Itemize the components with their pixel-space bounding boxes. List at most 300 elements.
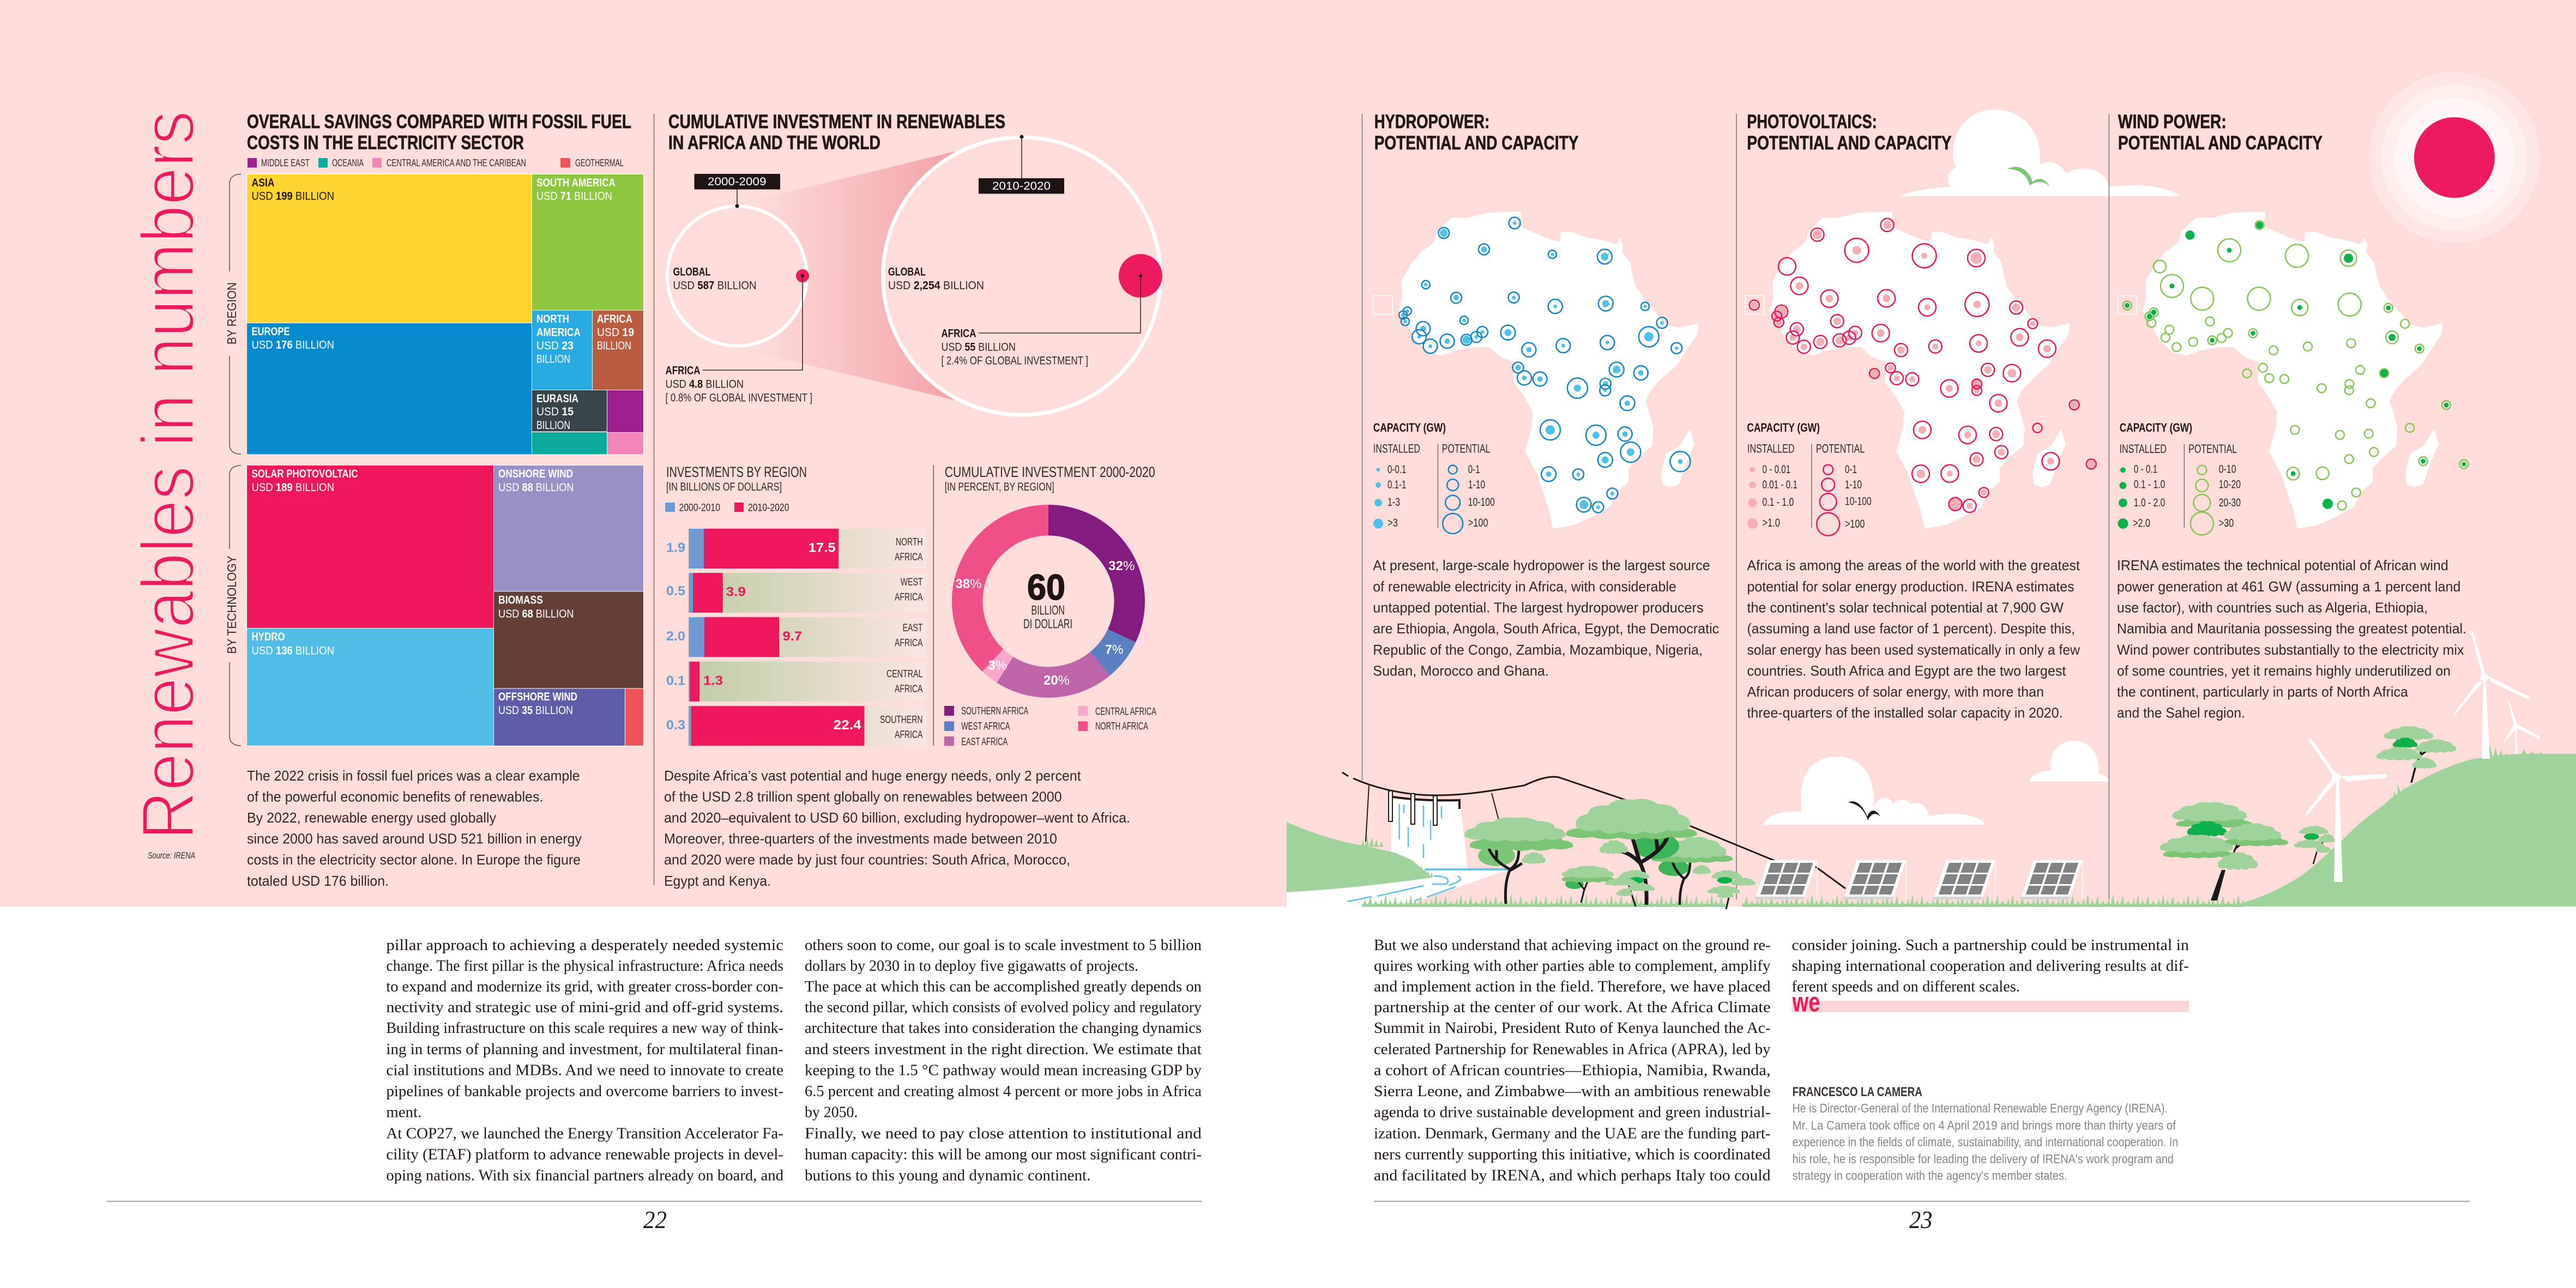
author bio: strategy in cooperation with the agency's member states.	[1793, 1169, 2067, 1183]
article text: page 23 column 1: and implement action in the field. Therefore, we have placed	[1374, 978, 1771, 995]
legend: hydropower capacity: POTENTIAL	[1442, 442, 1491, 456]
article text: page 22 column 2: the second pillar, which consists of evolved policy and regulatory	[805, 999, 1202, 1016]
text block: hydropower: Republic of the Congo, Zambia, Mozambique, Nigeria,	[1373, 642, 1703, 658]
tile: Middle East	[607, 390, 643, 432]
label: global 2,254: GLOBAL	[888, 266, 926, 278]
tile: Solar photovoltaic	[247, 465, 493, 628]
article text: page 23 column 2	[1791, 937, 2189, 995]
text block: photovoltaics: (assuming a land use factor of 1 percent). Despite this,	[1747, 620, 2075, 637]
bracket: by region: BY REGION	[225, 282, 239, 344]
text block: photovoltaics: the continent's solar technical potential at 7,900 GW	[1747, 600, 2064, 616]
article text: page 23 column 1: partnership at the center of our work. At the Africa Climate	[1374, 999, 1771, 1016]
legend: regions: OCEANIA	[332, 158, 364, 168]
bar: West Africa: 3.9	[726, 584, 746, 600]
heading: investments by region: [IN BILLIONS OF DOLLARS]	[666, 481, 782, 493]
potential rings	[2123, 221, 2469, 510]
badge: 2010-2020: 2010-2020	[992, 180, 1051, 192]
text block: investment paragraph: and 2020–equivalent to USD 60 billion, excluding hydropower–went to Africa.	[664, 809, 1130, 826]
label: Africa 4.8	[665, 364, 812, 404]
panel: photovoltaics	[1745, 111, 2096, 721]
tile: Hydro	[247, 628, 493, 746]
article text: page 22 column 1: to expand and modernize its grid, with greater cross-border con-	[386, 978, 783, 995]
ground and grass	[1362, 894, 2243, 907]
legend: regions: MIDDLE EAST	[261, 158, 310, 168]
bar: Central Africa: AFRICA	[895, 684, 923, 695]
legend: donut regions	[944, 706, 1156, 748]
installed dots	[1401, 221, 1682, 509]
heading: wind power	[2118, 111, 2322, 154]
bar: North Africa: 1.9	[666, 541, 685, 555]
tile: Oceania	[532, 432, 607, 455]
end mark: we	[1791, 987, 2189, 1017]
tile: South America: SOUTH AMERICA	[536, 177, 616, 189]
page number 22: 22	[643, 1206, 667, 1233]
tree C	[1651, 837, 1733, 905]
legend: hydropower capacity: >3	[1387, 517, 1398, 529]
label: Africa 55: AFRICA	[941, 327, 976, 340]
heading: photovoltaics: PHOTOVOLTAICS:	[1747, 111, 1877, 132]
tile: Offshore wind: USD 35 BILLION	[498, 704, 573, 717]
text block: savings paragraph: costs in the electricity sector alone. In Europe the figure	[247, 851, 581, 868]
legend: photovoltaics capacity: >1.0	[1762, 517, 1780, 529]
bar: North Africa	[666, 529, 926, 569]
bar: Central Africa: CENTRAL	[886, 668, 922, 680]
article text: page 22 column 2: The pace at which this can be accomplished greatly depends on	[805, 978, 1202, 995]
text block: investment paragraph: Despite Africa’s vast potential and huge energy needs, only 2 percent	[664, 767, 1081, 784]
donut chart: 7%	[1105, 642, 1123, 657]
hill right	[2227, 744, 2576, 906]
legend: hydropower capacity: 10-100	[1468, 496, 1495, 509]
donut chart: 60	[1027, 567, 1065, 607]
article text: page 22 column 1	[386, 937, 783, 1184]
heading: cumulative 2000-2020: [IN PERCENT, BY REGION]	[945, 481, 1054, 493]
text block: photovoltaics: potential for solar energy production. IRENA estimates	[1747, 578, 2074, 595]
tile: Asia: USD 199 BILLION	[252, 190, 334, 203]
tile: Asia: ASIA	[252, 177, 275, 189]
wind turbines	[2306, 630, 2541, 882]
article text: page 22 column 1: Building infrastructure on this scale requires a new way of think-	[386, 1020, 783, 1037]
article text: page 23 column 1: But we also understand that achieving impact on the ground re-	[1374, 937, 1771, 954]
tree B	[1566, 799, 1697, 905]
heading: investments by region	[666, 464, 807, 493]
heading: wind power: WIND POWER:	[2118, 111, 2227, 132]
map: Africa photovoltaics	[1745, 211, 2096, 529]
text block: investment paragraph: Moreover, three-quarters of the investments made between 2010	[664, 831, 1057, 847]
text block: savings paragraph: totaled USD 176 billion.	[247, 873, 389, 889]
bar: West Africa	[666, 573, 926, 613]
page number 23: 23	[1909, 1206, 1932, 1233]
legend: wind capacity: 0 - 0.1	[2134, 463, 2157, 475]
legend: photovoltaics capacity: 0.1 - 1.0	[1762, 496, 1794, 509]
illustration: sun	[2369, 72, 2540, 243]
circle: 2000-2009 global	[667, 206, 807, 346]
bracket: by region	[225, 174, 241, 454]
article text: page 22 column 2: architecture that takes into consideration the changing dynamics	[805, 1020, 1202, 1037]
bar: West Africa: AFRICA	[895, 592, 923, 603]
tile: Eurasia	[532, 390, 607, 432]
legend: photovoltaics capacity: 10-100	[1845, 495, 1872, 507]
tile: Onshore wind	[494, 465, 643, 591]
tile: North America: NORTH	[536, 313, 569, 325]
author bio: He is Director-General of the International Renewable Energy Agency (IRENA).	[1793, 1101, 2168, 1115]
heading: overall savings: OVERALL SAVINGS COMPARED WITH FOSSIL FUEL	[247, 111, 631, 132]
heading: cumulative 2000-2020: CUMULATIVE INVESTMENT 2000-2020	[945, 464, 1155, 480]
legend: hydropower capacity: 0-1	[1468, 463, 1480, 476]
article text: page 22 column 2: keeping to the 1.5 °C pathway would mean increasing GDP by	[805, 1062, 1202, 1079]
legend: hydropower capacity: 0-0.1	[1387, 463, 1406, 476]
legend: wind capacity: 0-10	[2219, 463, 2236, 475]
text block: savings paragraph	[247, 767, 582, 889]
legend: photovoltaics capacity: 0-1	[1845, 463, 1857, 476]
article text: page 23 column 1	[1374, 937, 1771, 1184]
text block: wind: power generation at 461 GW (assuming a 1 percent land	[2117, 578, 2460, 595]
text block: photovoltaics: Africa is among the areas of the world with the greatest	[1747, 557, 2080, 573]
text block: wind	[2117, 557, 2466, 721]
article text: page 22 column 1: cility (ETAF) platform to advance renewable projects in devel-	[386, 1146, 783, 1163]
label: global 587	[673, 266, 757, 292]
article text: page 23 column 1: agenda to drive sustainable development and green industrial-	[1374, 1104, 1771, 1121]
label: Africa 4.8: AFRICA	[665, 364, 700, 377]
tile: Eurasia: EURASIA	[536, 392, 578, 405]
legend: photovoltaics capacity: INSTALLED	[1747, 442, 1795, 456]
article text: page 22 column 1: ment.	[386, 1104, 421, 1121]
article text: page 23 column 1: Summit in Nairobi, President Ruto of Kenya launched the Ac-	[1374, 1020, 1771, 1037]
author bio	[1793, 1085, 2178, 1183]
page rules	[107, 1201, 2470, 1202]
text block: photovoltaics	[1747, 557, 2080, 721]
legend: periods: 2000-2010	[679, 503, 720, 513]
bar: Southern Africa: 22.4	[834, 718, 861, 733]
legend: photovoltaics capacity	[1747, 421, 1872, 536]
article text: page 22 column 2: and steers investment in the right direction. We estimate that	[805, 1041, 1202, 1058]
bar: Southern Africa: SOUTHERN	[880, 715, 922, 726]
text block: investment paragraph: of the USD 2.8 trillion spent globally on renewables between 2000	[664, 789, 1062, 805]
article text: page 22 column 2: Finally, we need to pay close attention to institutional and	[805, 1125, 1202, 1142]
tile: Onshore wind: ONSHORE WIND	[498, 468, 573, 480]
article text: page 22 column 1: cial institutions and MDBs. And we need to innovate to create	[386, 1062, 783, 1079]
heading: hydropower: HYDROPOWER:	[1374, 111, 1489, 132]
text block: photovoltaics: countries. South Africa and Egypt are the two largest	[1747, 662, 2066, 679]
waterfall and river	[1287, 797, 1510, 906]
circle: 2010-2020 global	[883, 137, 1160, 415]
text block: hydropower: are Ethiopia, Angola, South Africa, Egypt, the Democratic	[1373, 620, 1719, 637]
clouds lower	[1764, 741, 2109, 825]
label: Africa 4.8: [ 0.8% OF GLOBAL INVESTMENT ]	[665, 391, 812, 404]
end mark: we: we	[1792, 987, 1820, 1017]
tile: Eurasia: USD 15	[536, 406, 574, 418]
heading: photovoltaics: POTENTIAL AND CAPACITY	[1747, 132, 1952, 154]
tile: North America: BILLION	[536, 353, 570, 365]
label: Africa 55: [ 2.4% OF GLOBAL INVESTMENT ]	[941, 354, 1088, 367]
text block: investment paragraph: and 2020 were made by just four countries: South Africa, Morocco,	[664, 851, 1070, 868]
article text: page 22 column 2: dollars by 2030 in to deploy five gigawatts of projects.	[805, 958, 1138, 975]
text block: wind: Wind power contributes substantially to the electricity mix	[2117, 642, 2464, 658]
text block: hydropower: of renewable electricity in Africa, with considerable	[1373, 578, 1676, 595]
title: Renewables in numbers: Renewables in numbers	[126, 111, 210, 840]
tile: Solar photovoltaic: SOLAR PHOTOVOLTAIC	[252, 468, 358, 480]
legend: wind capacity: CAPACITY (GW)	[2120, 421, 2192, 434]
article text: page 22 column 1: nectivity and strategic use of mini-grid and off-grid systems.	[386, 999, 783, 1016]
legend: periods: 2010-2020	[748, 503, 789, 513]
legend: wind capacity: POTENTIAL	[2188, 442, 2237, 456]
legend: regions: GEOTHERMAL	[575, 158, 624, 168]
funnel between circles	[737, 152, 955, 400]
donut chart: 20%	[1043, 673, 1070, 688]
article text: page 23 column 1: a cohort of African countries—Ethiopia, Namibia, Rwanda,	[1374, 1062, 1771, 1079]
bar: West Africa: 0.5	[666, 584, 685, 598]
tile: North America	[532, 311, 592, 390]
tile: Africa: AFRICA	[597, 313, 632, 325]
map: Africa hydropower	[1373, 211, 1698, 529]
bar: Southern Africa	[666, 706, 926, 746]
label: global 2,254: USD 2,254 BILLION	[888, 280, 984, 292]
donut chart	[955, 520, 1135, 688]
tile: Onshore wind: USD 88 BILLION	[498, 481, 574, 494]
bar: Southern Africa: AFRICA	[895, 729, 923, 741]
legend: wind capacity: >2.0	[2133, 517, 2150, 530]
bar chart: regional investments	[666, 529, 926, 746]
small trees	[1562, 866, 1755, 909]
article text: page 22 column 2	[805, 937, 1202, 1184]
panel: cumulative investment by region	[664, 464, 1156, 889]
tile: Geothermal	[625, 689, 643, 746]
background: pink upper band	[0, 0, 2576, 906]
circle: Africa 2010-2020	[1119, 254, 1162, 298]
author bio: Mr. La Camera took office on 4 April 2019 and brings more than thirty years of	[1793, 1118, 2176, 1133]
text block: investment paragraph: Egypt and Kenya.	[664, 873, 771, 889]
donut chart: 32%	[1108, 559, 1135, 573]
bar: East Africa: 2.0	[666, 629, 685, 644]
legend: hydropower capacity	[1373, 421, 1495, 534]
legend: wind capacity: 20-30	[2219, 497, 2241, 509]
text block: savings paragraph: since 2000 has saved around USD 521 billion in energy	[247, 831, 582, 847]
panel: hydropower	[1373, 111, 1719, 679]
author bio: his role, he is responsible for leading the delivery of IRENA's work program and	[1793, 1152, 2174, 1166]
article text: page 23 column 1: quires working with other parties able to complement, amplify	[1374, 958, 1771, 975]
heading: photovoltaics	[1747, 111, 1952, 154]
badge: 2000-2009	[695, 174, 780, 190]
badge: 2000-2009: 2000-2009	[708, 176, 767, 188]
legend: donut regions: EAST AFRICA	[961, 736, 1008, 748]
tile: Biomass	[494, 592, 643, 688]
illustration: sky cloud with bird	[1899, 110, 2181, 196]
potential rings	[1399, 217, 1690, 513]
tile: Europe: USD 176 BILLION	[252, 339, 334, 351]
divider: left panels	[654, 114, 655, 885]
circle: Africa 2000-2009	[796, 269, 809, 282]
legend: hydropower capacity: 1-3	[1387, 496, 1400, 509]
article text: page 23 column 2: consider joining. Such a partnership could be instrumental in	[1791, 937, 2189, 954]
panel: cumulative investment	[665, 111, 1162, 415]
leader dots	[735, 135, 1142, 277]
tile: Biomass: USD 68 BILLION	[498, 608, 574, 620]
text block: savings paragraph: of the powerful economic benefits of renewables.	[247, 789, 543, 805]
legend: wind capacity: INSTALLED	[2120, 442, 2167, 456]
author bio: FRANCESCO LA CAMERA	[1793, 1085, 1922, 1099]
bar: Central Africa: 0.1	[666, 674, 685, 688]
bar: North Africa: AFRICA	[895, 552, 923, 563]
tree A	[1464, 817, 1573, 904]
text block: investment paragraph	[664, 767, 1130, 889]
legend: photovoltaics capacity: >100	[1845, 518, 1865, 530]
donut chart: 38%	[955, 577, 981, 591]
leader lines	[703, 137, 1141, 370]
legend: hydropower capacity: 0.1-1	[1387, 479, 1406, 491]
treemap: by technology	[246, 465, 644, 746]
legend: periods	[665, 503, 789, 513]
tile: North America: AMERICA	[536, 326, 581, 339]
legend: donut regions: NORTH AFRICA	[1095, 721, 1148, 733]
text block: hydropower: At present, large-scale hydropower is the largest source	[1373, 557, 1710, 573]
installed dots	[1751, 221, 2095, 510]
legend: regions: CENTRAL AMERICA AND THE CARIBEAN	[387, 158, 526, 168]
article text: page 22 column 2: by 2050.	[805, 1104, 858, 1121]
label: Africa 55	[941, 327, 1088, 367]
article text: page 22 column 1: pillar approach to achieving a desperately needed systemic	[386, 937, 783, 954]
article text: page 22 column 2: butions to this young and dynamic continent.	[805, 1168, 1090, 1184]
legend: donut regions: SOUTHERN AFRICA	[961, 706, 1029, 717]
article text: page 22 column 1: oping nations. With six financial partners already on board, and	[386, 1168, 783, 1184]
article text: page 23 column 1: celerated Partnership for Renewables in Africa (APRA), led by	[1374, 1041, 1771, 1058]
panel: overall savings	[225, 111, 644, 455]
article text: page 23 column 1: ners currently supporting this initiative, which is coordinated	[1374, 1146, 1771, 1163]
heading: hydropower: POTENTIAL AND CAPACITY	[1374, 132, 1578, 154]
panel: by technology	[225, 465, 644, 889]
article text: page 22 column 2: human capacity: this will be among our most significant contri-	[805, 1146, 1202, 1163]
tile: Eurasia: BILLION	[536, 419, 570, 432]
bar: Central Africa: 1.3	[703, 674, 723, 688]
heading: investments by region: INVESTMENTS BY REGION	[666, 464, 807, 480]
bar: East Africa: AFRICA	[895, 638, 923, 649]
tile: South America	[532, 174, 643, 310]
legend: hydropower capacity: >100	[1468, 517, 1488, 529]
tile: Offshore wind: OFFSHORE WIND	[498, 691, 577, 703]
tile: Biomass: BIOMASS	[498, 594, 543, 606]
dam pipes	[1389, 791, 1437, 825]
text block: wind: the continent, particularly in parts of North Africa	[2117, 684, 2409, 700]
legend: photovoltaics capacity: 0.01 - 0.1	[1762, 479, 1797, 491]
treemap: by region	[246, 173, 644, 455]
divider: bars and donut	[933, 465, 934, 746]
bar: East Africa	[666, 617, 926, 657]
bar: East Africa: 9.7	[783, 629, 802, 644]
heading: cumulative 2000-2020	[945, 464, 1155, 493]
legend: regions	[248, 158, 624, 168]
installed dots	[2125, 221, 2466, 509]
article text: page 23 column 1: Sierra Leone, and Zimbabwe—with an ambitious renewable	[1374, 1083, 1771, 1100]
tile: Central America	[607, 433, 643, 455]
tile: Europe	[247, 323, 532, 455]
bar: West Africa: WEST	[901, 577, 923, 588]
legend: hydropower capacity: 1-10	[1468, 479, 1485, 491]
text block: hydropower	[1373, 557, 1719, 679]
source note: Source: IRENA	[148, 850, 195, 861]
tile: Africa: BILLION	[597, 340, 631, 352]
heading: cumulative investment: IN AFRICA AND THE WORLD	[668, 132, 880, 154]
legend: wind capacity: 0.1 - 1.0	[2134, 479, 2165, 491]
legend: hydropower capacity: CAPACITY (GW)	[1373, 421, 1446, 434]
tile: South America: USD 71 BILLION	[536, 190, 612, 203]
legend: photovoltaics capacity: 1-10	[1845, 479, 1862, 491]
heading: wind power: POTENTIAL AND CAPACITY	[2118, 132, 2322, 154]
text block: photovoltaics: three-quarters of the installed solar capacity in 2020.	[1747, 705, 2063, 721]
heading: cumulative investment: CUMULATIVE INVESTMENT IN RENEWABLES	[668, 111, 1005, 132]
legend: donut regions: CENTRAL AFRICA	[1095, 706, 1156, 718]
legend: wind capacity	[2117, 421, 2241, 535]
heading: overall savings	[247, 111, 631, 154]
text block: wind: of some countries, yet it remains highly underutilized on	[2117, 662, 2451, 679]
donut chart: DI DOLLARI	[1023, 617, 1072, 631]
hill left	[1287, 822, 1433, 892]
badge: 2010-2020	[979, 178, 1064, 194]
article text: page 22 column 1: change. The first pillar is the physical infrastructure: Africa needs	[386, 958, 783, 975]
bracket: by technology: BY TECHNOLOGY	[225, 556, 239, 654]
tile: North America: USD 23	[536, 340, 574, 352]
author bio: experience in the fields of climate, sustainability, and international cooperation. In	[1793, 1135, 2178, 1149]
text block: hydropower: Sudan, Morocco and Ghana.	[1373, 662, 1549, 679]
text block: photovoltaics: solar energy has been used systematically in only a few	[1747, 642, 2080, 658]
tree F	[2376, 726, 2456, 783]
text block: wind: use factor), with countries such as Algeria, Ethiopia,	[2117, 600, 2428, 616]
text block: wind: IRENA estimates the technical potential of African wind	[2117, 557, 2448, 573]
heading: hydropower	[1374, 111, 1578, 154]
tile: Hydro: HYDRO	[252, 631, 285, 643]
tile: Africa	[593, 311, 643, 390]
label: global 587: GLOBAL	[673, 266, 711, 278]
bracket: by technology	[225, 465, 241, 746]
article text: page 22 column 2: others soon to come, our goal is to scale investment to 5 billion	[805, 937, 1202, 954]
panel: wind power	[2117, 111, 2469, 721]
label: Africa 55: USD 55 BILLION	[941, 341, 1016, 353]
bar: North Africa: NORTH	[896, 536, 922, 548]
legend: donut regions: WEST AFRICA	[961, 721, 1010, 733]
tree E	[2294, 826, 2335, 864]
label: global 2,254	[888, 266, 984, 292]
label: global 587: USD 587 BILLION	[673, 280, 757, 292]
legend: wind capacity: 1.0 - 2.0	[2134, 497, 2165, 509]
article text: page 23 column 2: ferent speeds and on different scales.	[1791, 978, 2020, 995]
bird black	[1848, 801, 1880, 820]
bar: East Africa: EAST	[903, 622, 923, 634]
donut chart: BILLION	[1031, 603, 1065, 618]
text block: wind: Namibia and Mauritania possessing the greatest potential.	[2117, 620, 2466, 637]
heading: cumulative investment	[668, 111, 1005, 154]
bar: North Africa: 17.5	[809, 541, 836, 555]
legend: wind capacity: 10-20	[2219, 479, 2241, 491]
article text: page 23 column 1: and facilitated by IRENA, and which perhaps Italy too could	[1374, 1168, 1771, 1184]
bar: Central Africa	[666, 662, 926, 702]
tile: Solar photovoltaic: USD 189 BILLION	[252, 481, 334, 494]
legend: photovoltaics capacity: POTENTIAL	[1816, 442, 1865, 456]
text block: wind: and the Sahel region.	[2117, 705, 2245, 721]
dividers: map panels	[1362, 114, 2109, 899]
legend: hydropower capacity: INSTALLED	[1373, 442, 1420, 456]
article text: page 22 column 1: ing in terms of planning and investment, for multilateral finan-	[386, 1041, 783, 1058]
bar: Southern Africa: 0.3	[666, 718, 685, 733]
illustration: landscape	[1287, 630, 2576, 909]
text block: savings paragraph: By 2022, renewable energy used globally	[247, 809, 496, 826]
tile: Offshore wind	[494, 689, 625, 746]
tile: Europe: EUROPE	[252, 325, 290, 338]
tile: Africa: USD 19	[597, 326, 634, 339]
article text: page 23 column 1: ization. Denmark, Germany and the UAE are the funding part-	[1374, 1125, 1771, 1142]
tile: Hydro: USD 136 BILLION	[252, 644, 334, 657]
power cables	[1342, 772, 1845, 888]
label: Africa 4.8: USD 4.8 BILLION	[665, 378, 744, 390]
tree D	[2160, 802, 2288, 900]
text block: hydropower: untapped potential. The largest hydropower producers	[1373, 600, 1704, 616]
legend: photovoltaics capacity: 0 - 0.01	[1762, 463, 1790, 476]
